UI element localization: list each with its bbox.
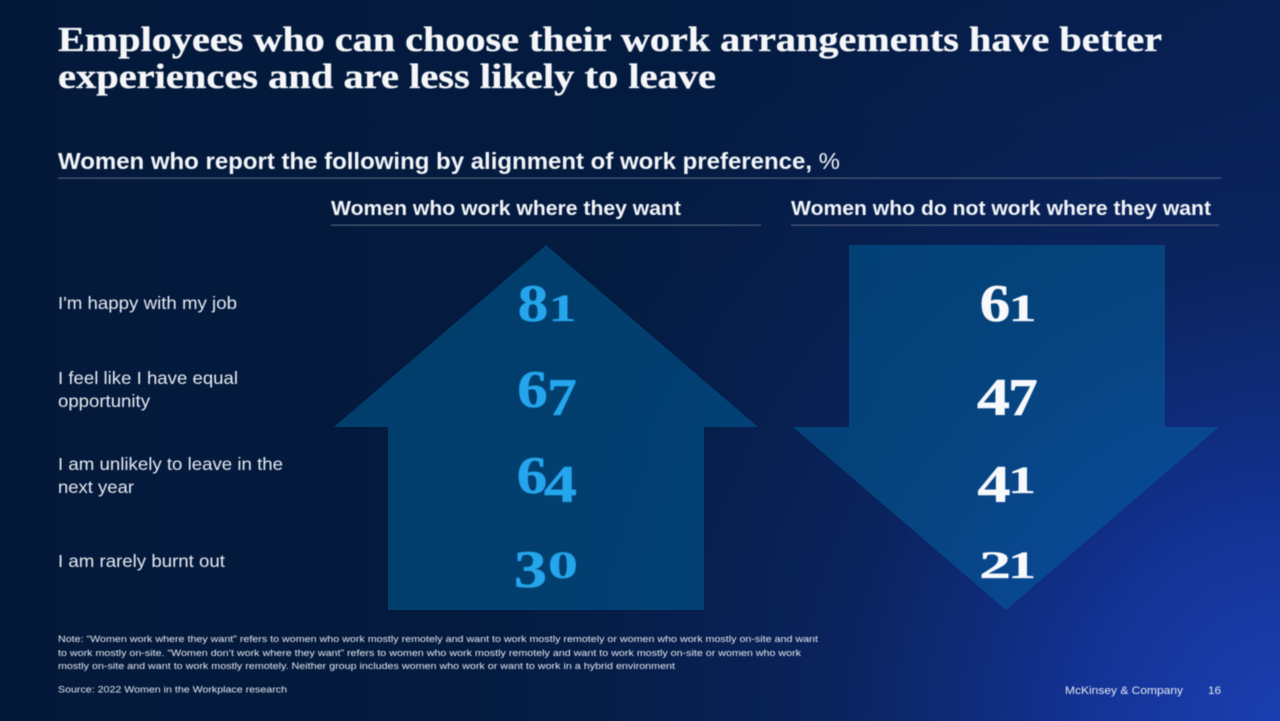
value 41: 1 [1008,459,1036,502]
footnote: to work mostly on-site. “Women don’t work where they want” refers to women who work mostly remotely and want to work mostly on-site or women who work [58,648,802,658]
title: experiences and are less likely to leave [58,57,716,96]
value 67: 6 [517,361,548,419]
value 81: 8 [518,275,548,333]
values: women who work where they want [514,275,578,598]
value 61: 1 [1009,287,1036,330]
label: happy with job: I'm happy with my job [58,293,237,313]
label: equal opportunity: I feel like I have equal [58,368,238,388]
footnote [58,634,819,671]
source: Source: 2022 Women in the Workplace research [58,684,287,694]
value 61 [980,275,1036,333]
label: rarely burnt out: I am rarely burnt out [58,551,225,571]
footnote: mostly on-site and want to work mostly remotely. Neither group includes women who work or want to work in a hybrid environment [58,661,676,671]
value 41: 4 [977,455,1011,513]
chart heading: Women who report the following by alignment of work preference, % [58,148,840,174]
value 81: 1 [549,287,576,330]
value 47: 7 [1008,369,1038,427]
label: equal opportunity: opportunity [58,391,150,411]
label: unlikely to leave: next year [58,477,134,497]
up arrow [334,245,758,610]
footnote: Note: “Women work where they want” refers to women who work mostly remotely and want to work mostly remotely or women who work mostly on-site and want [58,634,819,644]
title: Employees who can choose their work arrangements have better [58,20,1162,59]
label: equal opportunity [58,368,238,411]
row labels [58,293,283,571]
value 64 [517,447,577,513]
value 64: 4 [544,455,577,513]
value 81 [518,275,576,333]
value 61: 6 [980,275,1010,333]
values: women who do not work where they want [977,275,1038,587]
value 47: 4 [977,368,1010,426]
value 67 [517,361,577,427]
column heading: women who work where they want: Women who work where they want [331,197,681,220]
title [58,20,1162,96]
down arrow [793,245,1219,610]
page number: 16 [1208,685,1221,697]
label: unlikely to leave [58,454,283,497]
company credit: McKinsey & Company [1065,685,1184,697]
value 30: 0 [548,543,578,586]
value 64: 6 [517,447,547,505]
value 21 [979,544,1036,587]
value 21: 1 [1008,544,1036,587]
label: unlikely to leave: I am unlikely to leave in the [58,454,283,474]
column heading: women who do not work where they want: Women who do not work where they want [791,197,1211,220]
value 47 [977,368,1038,427]
value 30 [514,540,578,598]
value 21: 2 [979,544,1011,587]
value 30: 3 [514,540,547,598]
value 67: 7 [547,369,577,427]
value 41 [977,455,1036,513]
